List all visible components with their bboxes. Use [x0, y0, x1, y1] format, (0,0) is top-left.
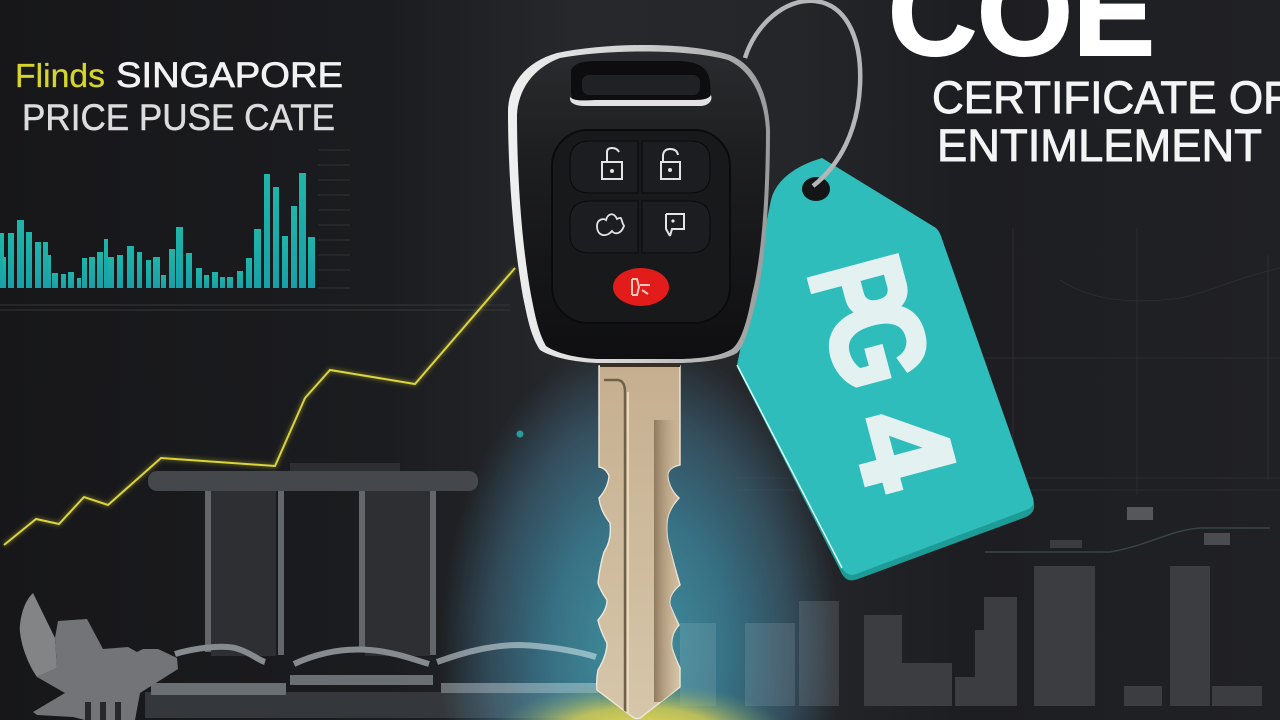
faint trend line and chart labels — [985, 507, 1270, 552]
teal key tag — [737, 158, 1034, 580]
title: Singapore price rise rate: PRICE PUSE CATE — [22, 97, 335, 138]
fob chrome edge — [508, 45, 770, 363]
title: Singapore price rise rate: SINGAPORE — [116, 56, 343, 95]
button: trunk — [570, 201, 638, 253]
button: lock — [642, 141, 710, 193]
button panel — [552, 130, 730, 323]
Marina Bay Sands silhouette — [145, 463, 600, 718]
skyline silhouette, right — [680, 566, 1262, 706]
hole in tag — [802, 177, 830, 201]
fob slot — [570, 61, 711, 106]
button: unlock — [570, 141, 638, 193]
bar chart: price rise — [0, 173, 315, 288]
tag text: 4 — [823, 393, 984, 504]
glow beneath key — [440, 340, 840, 720]
tag text: P — [780, 242, 937, 341]
key fob — [508, 45, 770, 363]
faint background grid — [0, 150, 1280, 495]
key ring — [745, 1, 860, 186]
subtitle: Certificate of Entitlement — [932, 72, 1280, 171]
yellow rising trend line — [4, 268, 515, 545]
title: Singapore price rise rate: Flinds — [15, 57, 105, 94]
button: door — [642, 201, 710, 253]
key blade — [597, 358, 680, 718]
ArtScience Museum silhouette — [20, 593, 178, 720]
subtitle: Certificate of Entitlement: ENTIMLEMENT — [937, 120, 1262, 171]
tag text — [780, 242, 984, 504]
teal dot — [516, 430, 524, 438]
fob body — [517, 51, 766, 359]
title: Singapore price rise rate — [15, 56, 343, 138]
red panic button — [613, 268, 669, 306]
tag text: G — [796, 286, 958, 403]
